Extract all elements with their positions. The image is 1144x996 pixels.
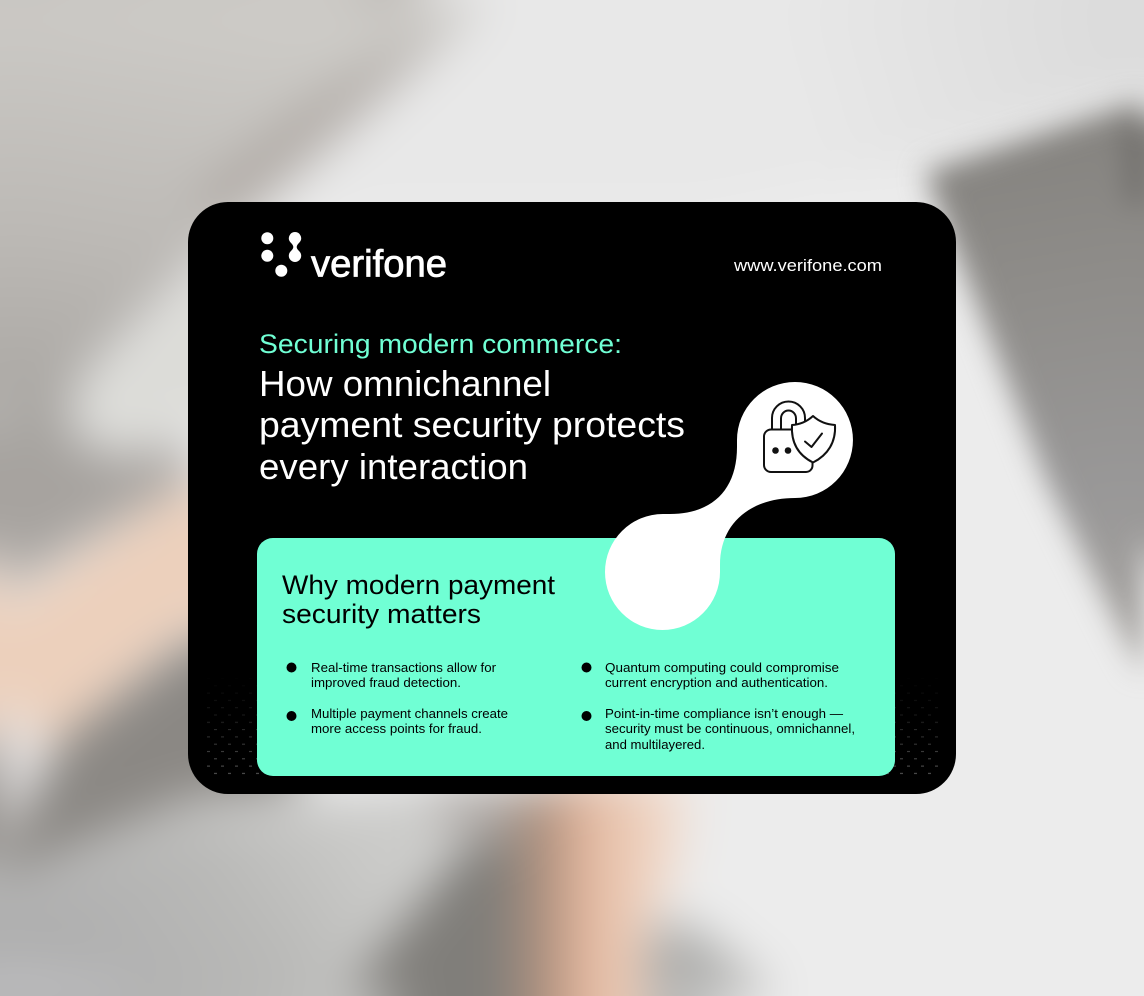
- shield: [792, 416, 835, 462]
- title: every interaction: [259, 446, 528, 487]
- bullet: point-in-time compliance: [582, 706, 855, 752]
- bullet: point-in-time compliance: and multilayered.: [605, 737, 705, 752]
- dotted pattern: [207, 692, 938, 774]
- title: How omnichannel: [259, 363, 551, 404]
- website url: www.verifone.com: [733, 256, 882, 275]
- bullet: real-time transactions: Real-time transactions allow for: [311, 660, 497, 675]
- padlock: [764, 402, 812, 472]
- bullet: quantum computing: Quantum computing could compromise: [605, 660, 839, 675]
- panel heading: security matters: [282, 599, 481, 629]
- logo wordmark: verifone: [311, 244, 447, 286]
- bullet: point-in-time compliance: security must be continuous, omnichannel,: [605, 721, 855, 736]
- bullet: point-in-time compliance: Point-in-time compliance isn’t enough —: [605, 706, 843, 721]
- bullet: multiple payment channels: Multiple payment channels create: [311, 706, 508, 721]
- title: [259, 363, 685, 487]
- title: payment security protects: [259, 404, 685, 445]
- bullet: quantum computing: current encryption and authentication.: [605, 675, 828, 690]
- bullet: real-time transactions: improved fraud detection.: [311, 675, 461, 690]
- logo mark: [261, 232, 301, 277]
- bullet: multiple payment channels: more access points for fraud.: [311, 721, 482, 736]
- bullet: quantum computing: [582, 660, 839, 690]
- card: [188, 202, 956, 794]
- panel heading: Why modern payment: [282, 570, 556, 600]
- panel: why modern payment security matters: [257, 538, 895, 776]
- subtitle: Securing modern commerce:: [259, 329, 622, 359]
- white connector blob: [605, 382, 853, 630]
- panel heading: [282, 570, 556, 629]
- bullet: real-time transactions: [286, 660, 497, 690]
- logo: [261, 232, 447, 286]
- bullet: multiple payment channels: [286, 706, 508, 736]
- icon: padlock with shield: [764, 402, 835, 472]
